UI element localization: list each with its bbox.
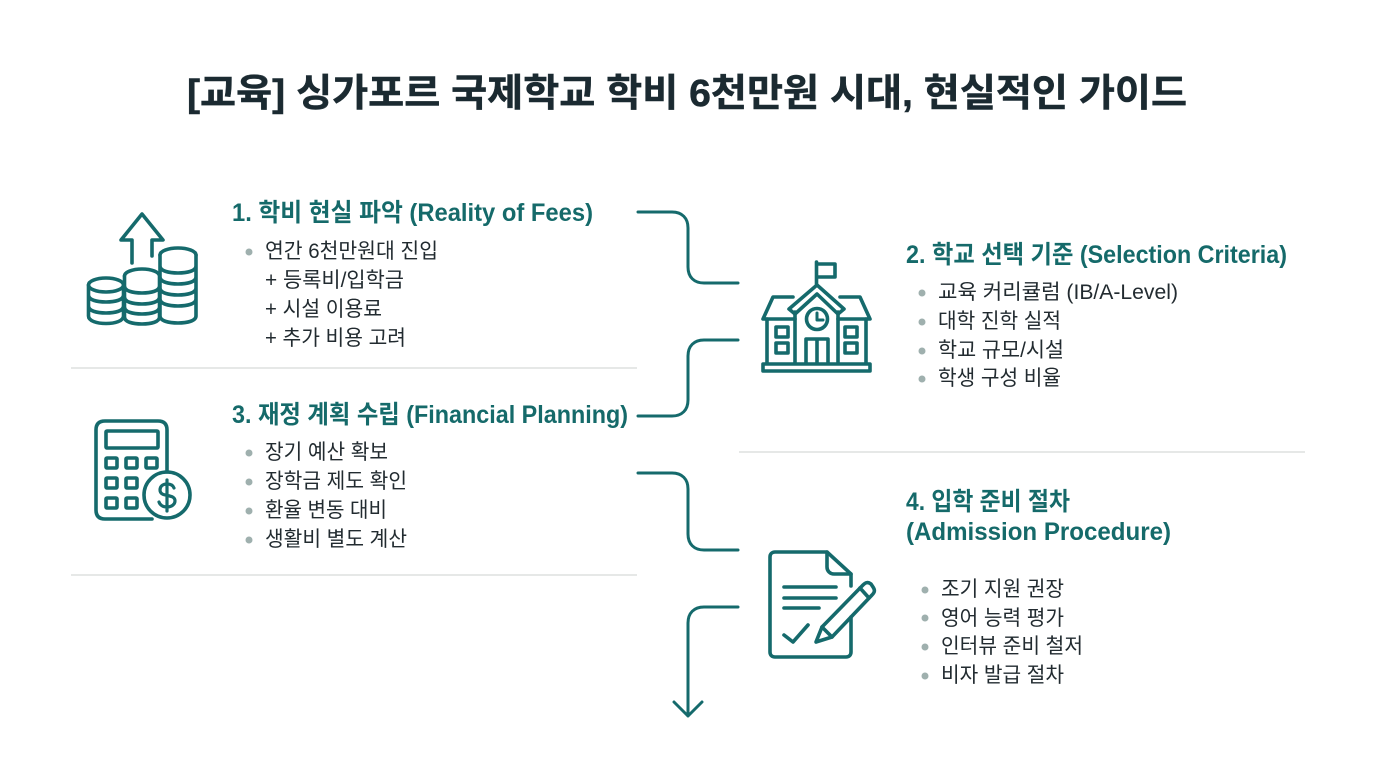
heading 4 <box>906 488 1171 546</box>
list 2: 대학 진학 실적 <box>938 310 1061 333</box>
icon: school building <box>763 262 870 371</box>
heading 3: 3. 재정 계획 수립 (Financial Planning) <box>232 401 628 429</box>
arrow: step 3 to school <box>638 340 738 416</box>
list 1: 연간 6천만원대 진입 <box>265 240 438 263</box>
panel: 1 reality of fees <box>88 199 593 350</box>
arrow: step 1 to school <box>638 212 738 283</box>
list 3: 생활비 별도 계산 <box>265 528 407 551</box>
list 3: 환율 변동 대비 <box>265 499 387 522</box>
list 4: 인터뷰 준비 철저 <box>941 635 1083 658</box>
panel: 3 financial planning <box>96 401 628 551</box>
list 1: + 등록비/입학금 <box>265 269 404 292</box>
heading 1: 1. 학비 현실 파악 (Reality of Fees) <box>232 199 593 227</box>
list 4: 조기 지원 권장 <box>941 578 1064 601</box>
list 2: 학교 규모/시설 <box>938 339 1064 362</box>
list 4 <box>922 578 1083 687</box>
heading 4: 4. 입학 준비 절차 <box>906 488 1070 516</box>
list 4: 영어 능력 평가 <box>941 607 1064 630</box>
list 3 <box>246 441 407 551</box>
list 1: + 시설 이용료 <box>265 298 382 321</box>
panel: 4 admission procedure <box>770 488 1171 687</box>
arrow: document down <box>674 607 738 716</box>
panel: 2 selection criteria <box>763 241 1287 390</box>
arrow: to document <box>638 473 738 550</box>
list 1: + 추가 비용 고려 <box>265 327 406 350</box>
icon: document and pencil <box>770 552 874 657</box>
list 3: 장기 예산 확보 <box>265 441 388 464</box>
title: [교육] 싱가포르 국제학교 학비 6천만원 시대, 현실적인 가이드 <box>187 73 1187 115</box>
list 4: 비자 발급 절차 <box>941 664 1064 687</box>
list 2: 교육 커리큘럼 (IB/A-Level) <box>938 281 1178 304</box>
list 1 <box>246 240 438 350</box>
list 3: 장학금 제도 확인 <box>265 470 407 493</box>
icon: calculator with dollar <box>96 421 190 519</box>
list 2 <box>918 281 1178 390</box>
icon: coins with up arrow <box>88 214 196 324</box>
heading 2: 2. 학교 선택 기준 (Selection Criteria) <box>906 241 1287 269</box>
heading 4: (Admission Procedure) <box>906 518 1171 546</box>
list 2: 학생 구성 비율 <box>938 367 1061 390</box>
